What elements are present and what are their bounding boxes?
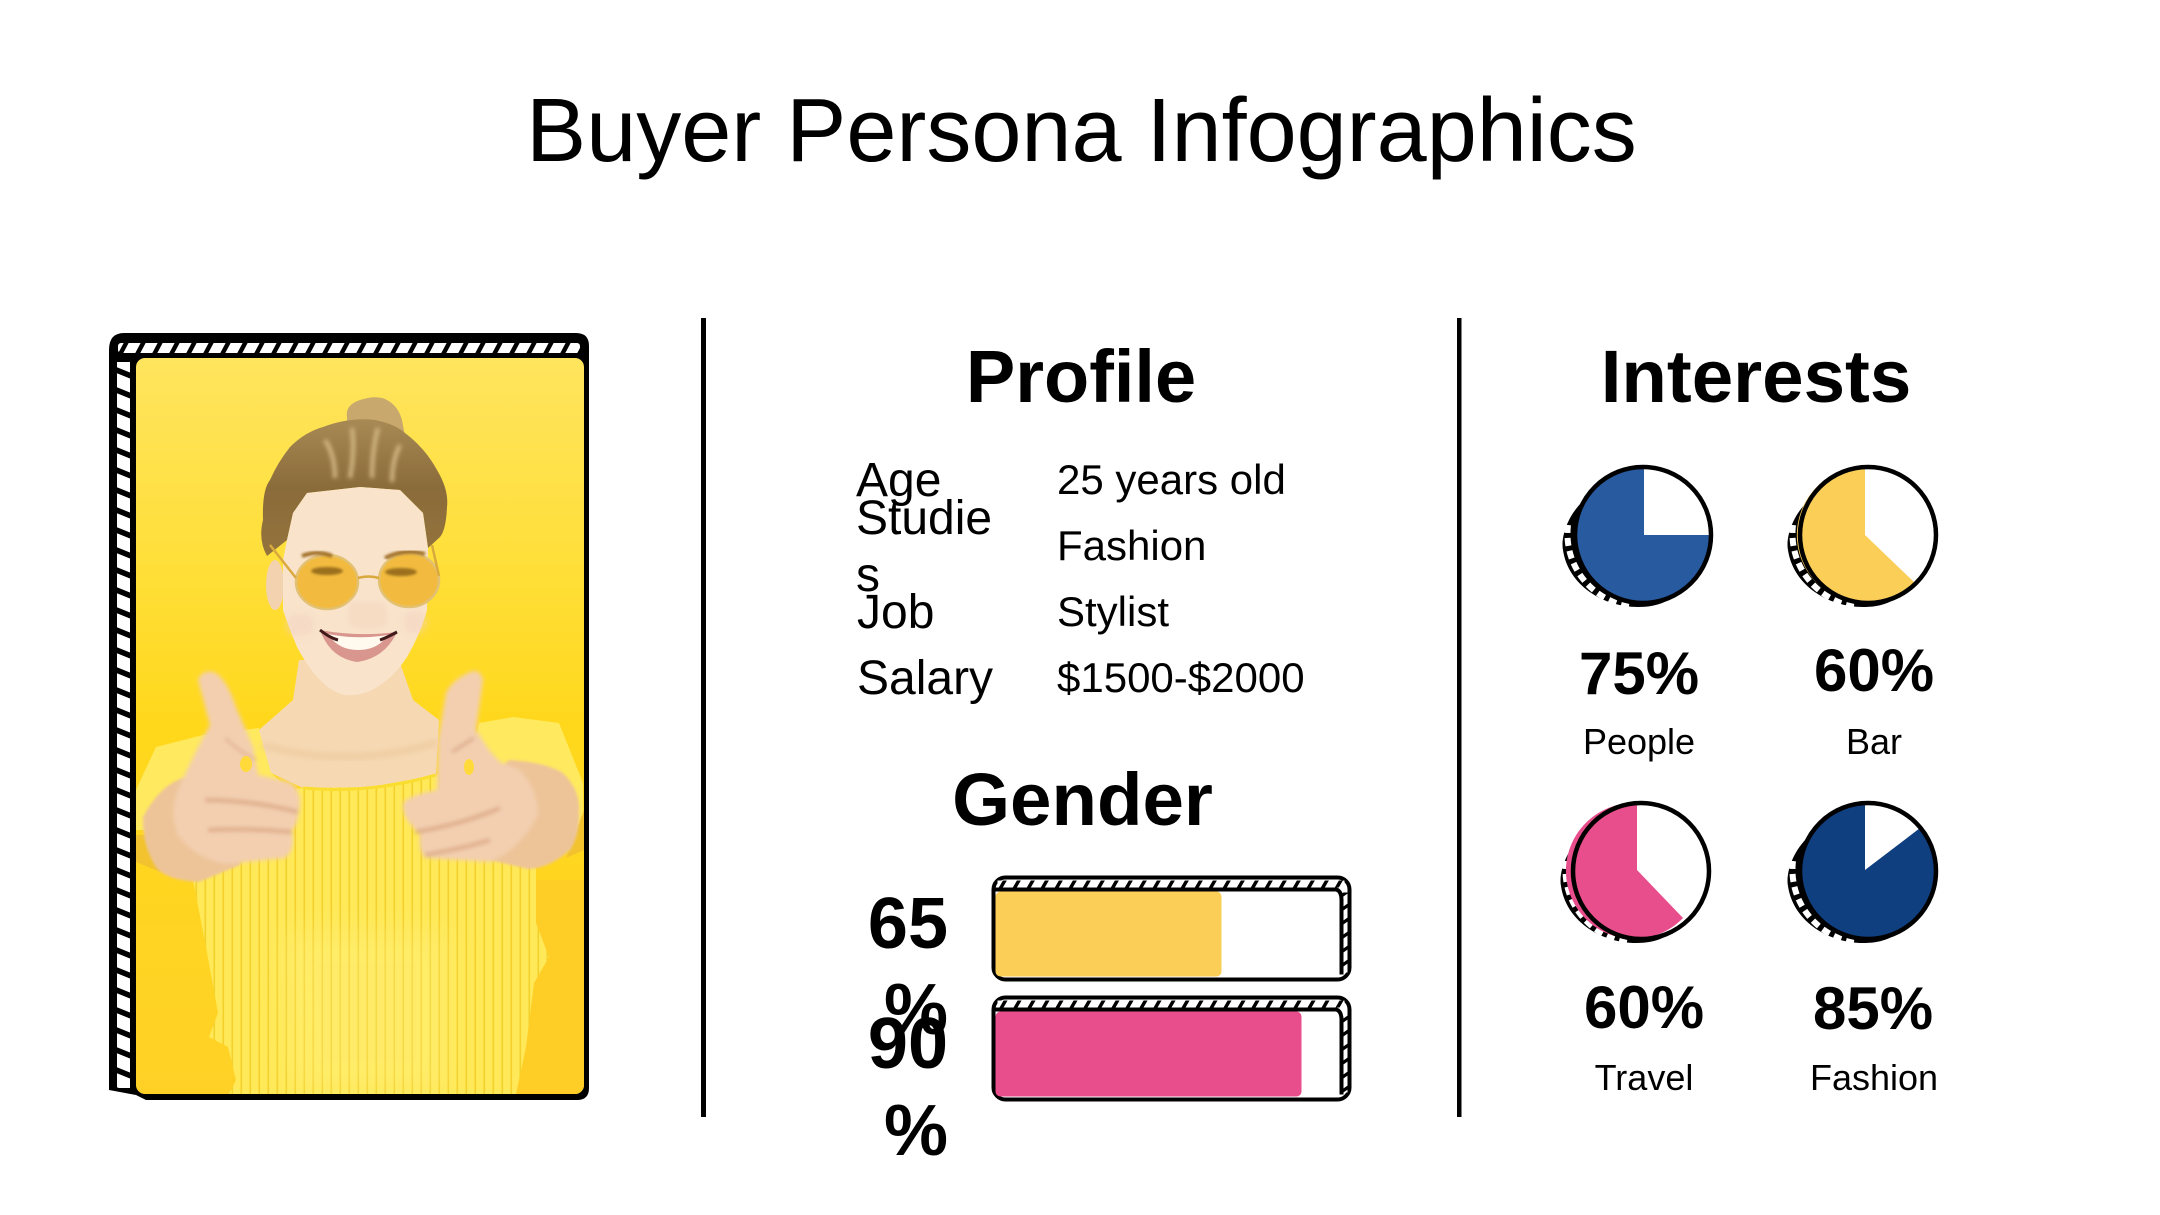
interest label: fashion: Fashion xyxy=(1810,1057,1938,1098)
title: Buyer Persona Infographics xyxy=(526,81,1637,181)
profile labels: Salary xyxy=(857,652,993,705)
profile labels: Studie xyxy=(856,492,992,545)
heading: profile: Profile xyxy=(966,335,1196,418)
nails xyxy=(240,756,252,772)
interest value: bar: 60% xyxy=(1814,637,1934,704)
interest label: people: People xyxy=(1583,721,1695,762)
divider: left xyxy=(701,318,706,1117)
pie: bar 60% xyxy=(1788,467,1936,607)
gender value: 65%: 65 xyxy=(868,884,948,964)
gender value: 90%: % xyxy=(884,1091,948,1171)
mouth xyxy=(320,630,397,662)
divider: right xyxy=(1457,318,1462,1117)
pie: fashion 85% xyxy=(1788,803,1936,943)
sunglasses xyxy=(270,545,439,609)
hand: left xyxy=(173,672,300,864)
heading: gender: Gender xyxy=(952,758,1213,841)
nose xyxy=(347,600,352,604)
pie: people 75% xyxy=(1563,467,1712,607)
shirt xyxy=(193,775,549,1094)
heading: interests: Interests xyxy=(1601,335,1911,418)
hand: right xyxy=(403,671,538,862)
sleeves xyxy=(136,728,281,830)
photo: smiling woman in yellow xyxy=(136,358,584,1094)
profile values: Stylist xyxy=(1057,588,1169,635)
bun xyxy=(347,397,405,436)
profile values: $1500-$2000 xyxy=(1057,654,1305,701)
profile labels xyxy=(856,454,993,705)
gender bar: 90% xyxy=(994,998,1350,1100)
face xyxy=(283,487,428,695)
interest label: travel: Travel xyxy=(1595,1057,1693,1098)
panel: persona photo xyxy=(109,333,589,1100)
hair xyxy=(261,419,447,556)
pie: travel 60% xyxy=(1561,803,1709,943)
neck and chest xyxy=(259,660,439,788)
profile values xyxy=(1057,456,1305,701)
gender value: 65% xyxy=(868,884,948,1050)
interest value: fashion: 85% xyxy=(1813,975,1933,1042)
arm: right xyxy=(480,760,579,869)
gender value: 65%: % xyxy=(884,970,948,1050)
gender bar: 65% xyxy=(994,878,1350,980)
profile table xyxy=(856,454,1305,705)
profile labels: s xyxy=(856,549,880,602)
profile values: 25 years old xyxy=(1057,456,1286,503)
profile labels: Job xyxy=(857,586,934,639)
profile values: Fashion xyxy=(1057,522,1206,569)
photo frame xyxy=(109,333,589,1100)
interest value: people: 75% xyxy=(1579,640,1699,707)
gender value: 90%: 90 xyxy=(868,1004,948,1084)
arm: left xyxy=(143,778,240,882)
interest value: travel: 60% xyxy=(1584,974,1704,1041)
ear xyxy=(266,560,284,610)
profile labels: Age xyxy=(856,454,941,507)
gender value: 90% xyxy=(868,1004,948,1171)
interest label: bar: Bar xyxy=(1846,721,1902,762)
